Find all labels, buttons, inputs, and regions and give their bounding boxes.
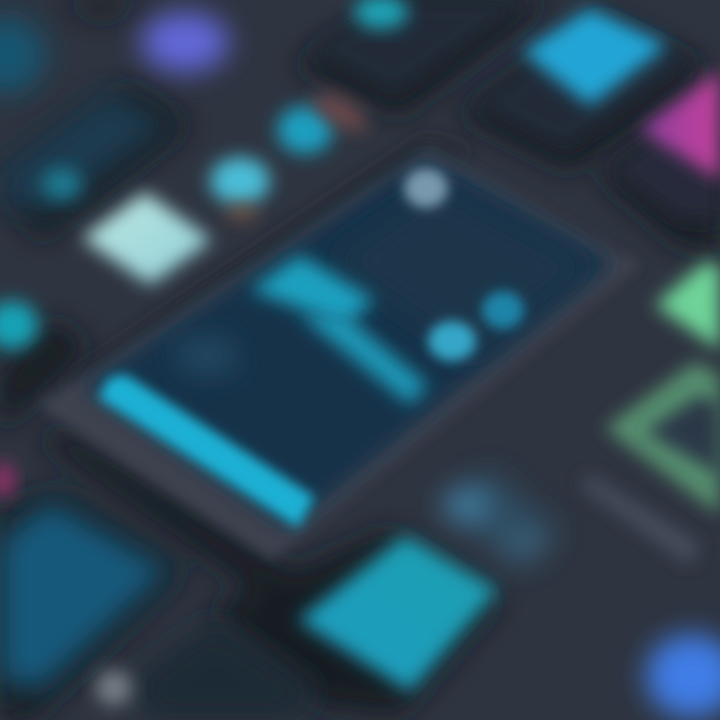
block: cyan header: [250, 255, 375, 325]
icon: left tile dot: [42, 168, 82, 200]
tile: magenta: [610, 70, 720, 220]
icon: left cyan dot: [0, 301, 38, 349]
tile: left blue: [0, 90, 170, 215]
phone screen: [85, 155, 612, 528]
accent: left magenta: [0, 462, 15, 498]
tile: top right: [475, 8, 695, 150]
tile: pale mint: [82, 192, 212, 285]
bar: gray: [580, 475, 700, 565]
icon: pale dot: [404, 168, 448, 208]
phone outline top shadow: [60, 138, 470, 400]
tile: green: [655, 262, 720, 350]
tile: bottom cyan: [298, 535, 498, 692]
icon: cyan dot 2: [482, 291, 524, 329]
tile: bottom left blue: [0, 500, 170, 690]
bar: lower cyan: [98, 374, 315, 528]
accent: orange glow: [226, 86, 372, 219]
tile: top left blue: [0, 17, 45, 93]
icon: cyan dots: [210, 106, 333, 205]
icon: blue blob: [646, 634, 720, 718]
bar: cyan underline: [300, 315, 428, 405]
text hint: [170, 335, 240, 375]
tile: top center: [310, 0, 530, 95]
phone screen shade: [330, 185, 590, 360]
icon: top cyan dot: [354, 0, 408, 29]
tile: text hint: [440, 470, 560, 570]
icon: white dot: [96, 670, 132, 706]
icon: cyan dot 1: [428, 321, 476, 361]
tile: green outline: [605, 362, 720, 515]
phone body: [38, 145, 640, 560]
icon: purple blob: [141, 12, 229, 72]
icon: cyan square: [522, 8, 668, 106]
tile: bottom center dark: [130, 620, 320, 720]
phone: [38, 138, 640, 560]
